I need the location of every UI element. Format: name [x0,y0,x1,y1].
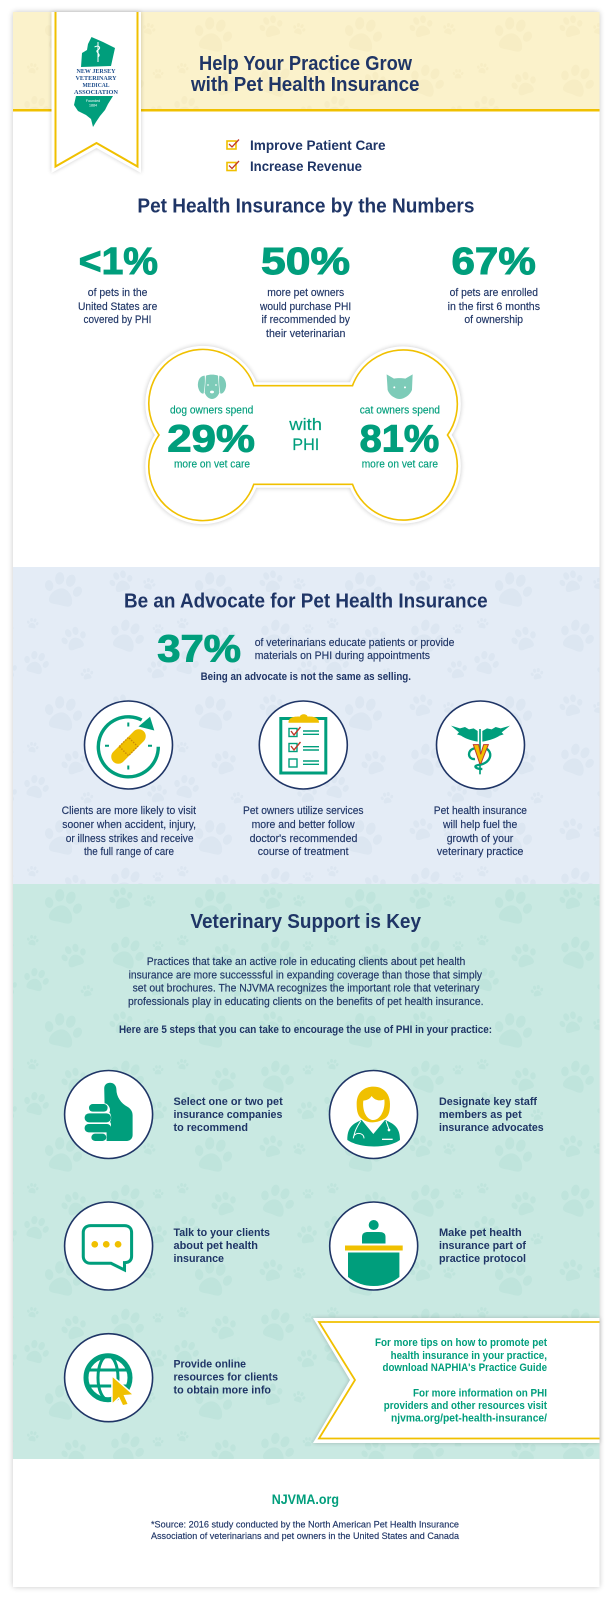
step text 1 [174,1096,283,1134]
stat: 67 percent [448,241,540,326]
panel: advocate [13,567,600,884]
benefit text 3: will help fuel the [442,819,517,831]
step text 2: Designate key staff [439,1096,537,1108]
benefit text 3: Pet health insurance [434,805,527,817]
benefit text 1: or illness strikes and receive [66,833,194,845]
callout: more resources: health insurance in your practice, [391,1350,547,1362]
benefit text 1: sooner when accident, injury, [62,819,196,831]
step text 1: Select one or two pet [174,1096,283,1108]
icon: thumbs up [65,1070,153,1158]
intro paragraph: professionals play in educating clients on the benefits of pet health insurance. [128,996,484,1008]
benefit text 2: course of treatment [258,846,349,858]
stat: under 1 percent: United States are [78,301,157,313]
callout: more resources: download NAPHIA's Practice Guide [382,1362,547,1374]
checklist: Increase Revenue [250,159,362,174]
source note: Association of veterinarians and pet owners in the United States and Canada [151,1531,460,1542]
icon: globe with cursor [65,1334,153,1422]
with PHI text: with [288,415,322,434]
step text 5 [174,1359,278,1397]
benefit text 2 [243,805,364,858]
callout: more resources: For more tips on how to promote pet [375,1337,547,1349]
step text 4: practice protocol [439,1253,526,1265]
step text 5: resources for clients [174,1372,278,1384]
callout: more resources [313,1318,600,1443]
steps intro: Here are 5 steps that you can take to encourage the use of PHI in your practice: [119,1024,492,1036]
step text 5: to obtain more info [174,1385,271,1397]
checklist [227,138,386,174]
step text 4 [439,1227,526,1265]
icon: veterinary caduceus [436,701,524,789]
step text 1: to recommend [174,1122,248,1134]
with PHI text [288,415,322,454]
heading: advocate: Be an Advocate for Pet Health Insurance [124,590,488,612]
logo text: NEW JERSEY [76,68,116,75]
with PHI text: PHI [292,435,319,454]
intro paragraph [128,956,484,1008]
ribbon with NJVMA logo: 1884 [89,104,97,108]
stat: under 1 percent: covered by PHI [84,314,151,326]
callout: more resources: njvma.org/pet-health-insurance/ [391,1413,547,1425]
source note: *Source: 2016 study conducted by the North American Pet Health Insurance [151,1520,459,1531]
icon: bandage clock [84,701,172,789]
cat text: cat owners spend [360,404,440,416]
stat: 67 percent: of pets are enrolled [450,287,538,299]
stat: 50 percent: if recommended by [262,314,350,326]
step text 3: Talk to your clients [174,1227,270,1239]
callout: advocate note: Being an advocate is not the same as selling. [201,671,411,683]
source note [151,1520,460,1542]
step text 3: about pet health [174,1240,258,1252]
intro paragraph: Practices that take an active role in educating clients about pet health [147,956,465,968]
icon: veterinary staff member [330,1070,418,1158]
icon: New Jersey map south [74,96,113,127]
step text 3: insurance [174,1253,224,1265]
heading: support: Veterinary Support is Key [190,911,422,933]
ribbon with NJVMA logo: Founded [86,99,100,103]
step text 5: Provide online [174,1359,246,1371]
step text 2 [439,1096,544,1134]
panel: header band [13,12,600,112]
heading: by the numbers: Pet Health Insurance by the Numbers [137,196,474,218]
step text 4: Make pet health [439,1227,522,1239]
stat: 50 percent: would purchase PHI [259,301,351,313]
stat: 67 percent: of ownership [464,314,523,326]
icon: checkbox [227,161,239,170]
step text 1: insurance companies [174,1109,282,1121]
benefit text 3: growth of your [447,833,514,845]
icon: clipboard [259,701,347,789]
icon: cat [387,374,413,399]
stat: 67 percent: 67% [452,241,536,283]
dog text: more on vet care [174,458,250,470]
stat: 37 percent: 37% [157,629,241,671]
callout: more resources: For more information on PHI [413,1388,547,1400]
benefit text 1 [62,805,196,858]
footer link: NJVMA.org [272,1491,339,1507]
stat: 50 percent: more pet owners [267,287,345,299]
title: Help Your Practice Grow [199,53,412,75]
dog text: dog owners spend [170,404,253,416]
benefit text 3 [434,805,527,858]
panel: veterinary support [13,884,600,1459]
logo text: VETERINARY [76,75,117,82]
step text 4: insurance part of [439,1240,526,1252]
icon: speech bubble [65,1202,153,1290]
stat: 67 percent: in the first 6 months [448,301,540,313]
stat text: 37 percent [255,637,454,662]
ribbon with NJVMA logo [52,12,141,173]
step text 3 [174,1227,270,1265]
logo text [74,68,118,96]
benefit text 1: Clients are more likely to visit [62,805,196,817]
stat text: 37 percent: materials on PHI during appointments [255,650,430,662]
stat: 50 percent [259,241,351,340]
callout: more resources: providers and other resources visit [384,1400,547,1412]
benefit text 2: doctor's recommended [250,833,357,845]
stat: 50 percent: 50% [261,241,350,283]
stat text: 37 percent: of veterinarians educate patients or provide [255,637,454,649]
intro paragraph: set out brochures. The NJVMA recognizes the important role that veterinary [133,983,480,995]
checklist: Improve Patient Care [250,138,386,153]
stat: 50 percent: their veterinarian [266,328,345,340]
icon: checkbox [227,140,239,149]
icon: dog [198,375,226,399]
benefit text 1: the full range of care [84,846,174,858]
panel: bone [149,349,457,521]
intro paragraph: insurance are more successsful in expanding coverage than those that simply [129,969,482,981]
icon: reception desk [330,1202,418,1290]
logo text: ASSOCIATION [74,89,118,96]
dog text: 29% [167,419,255,461]
title: with Pet Health Insurance [190,74,420,96]
cat text: 81% [360,419,439,461]
icon: New Jersey map north [81,37,115,67]
stat: under 1 percent: of pets in the [88,287,148,299]
stat: under 1 percent: <1% [79,241,158,283]
benefit text 2: Pet owners utilize services [243,805,364,817]
cat text [360,404,440,470]
dog text [167,404,255,470]
step text 2: members as pet [439,1109,522,1121]
title [190,53,420,96]
cat text: more on vet care [362,458,438,470]
stat: under 1 percent [78,241,158,326]
benefit text 2: more and better follow [252,819,355,831]
step text 2: insurance advocates [439,1122,544,1134]
benefit text 3: veterinary practice [437,846,523,858]
logo text: MEDICAL [82,82,110,89]
